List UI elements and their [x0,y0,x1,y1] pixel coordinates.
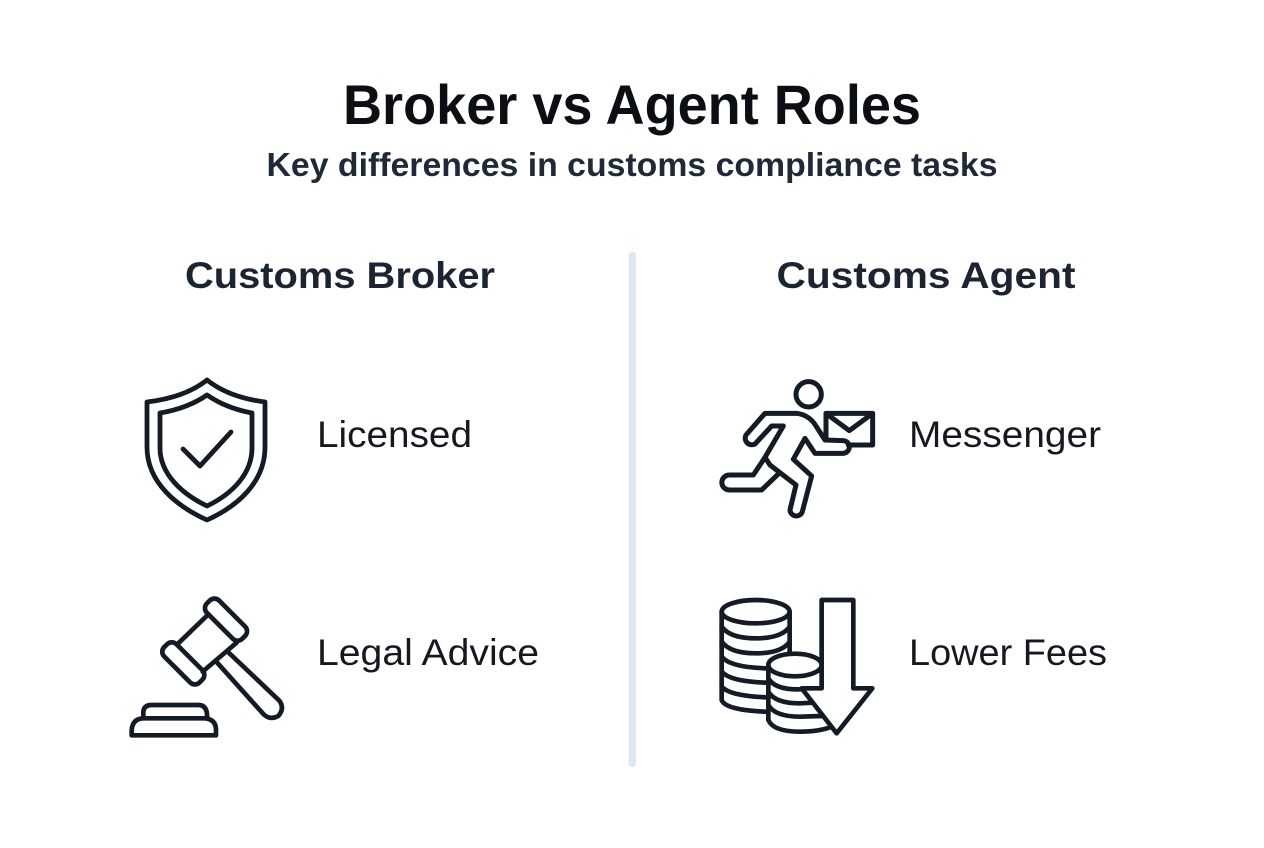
subtitle: Key differences in customs compliance tasks [266,146,998,183]
label: licensed: Licensed [317,414,472,455]
down arrow [802,600,872,733]
title: Broker vs Agent Roles [343,73,921,136]
icon: coin stacks with down arrow [722,600,872,733]
icon: running messenger with envelope [722,382,873,516]
column heading: customs agent: Customs Agent [776,255,1076,296]
label: lower fees: Lower Fees [909,632,1107,673]
icon: shield with check [147,380,265,520]
icon: gavel [132,596,282,735]
column heading: customs broker: Customs Broker [185,255,495,296]
label: legal advice: Legal Advice [317,632,539,673]
center divider [628,252,636,767]
label: messenger: Messenger [909,414,1101,455]
